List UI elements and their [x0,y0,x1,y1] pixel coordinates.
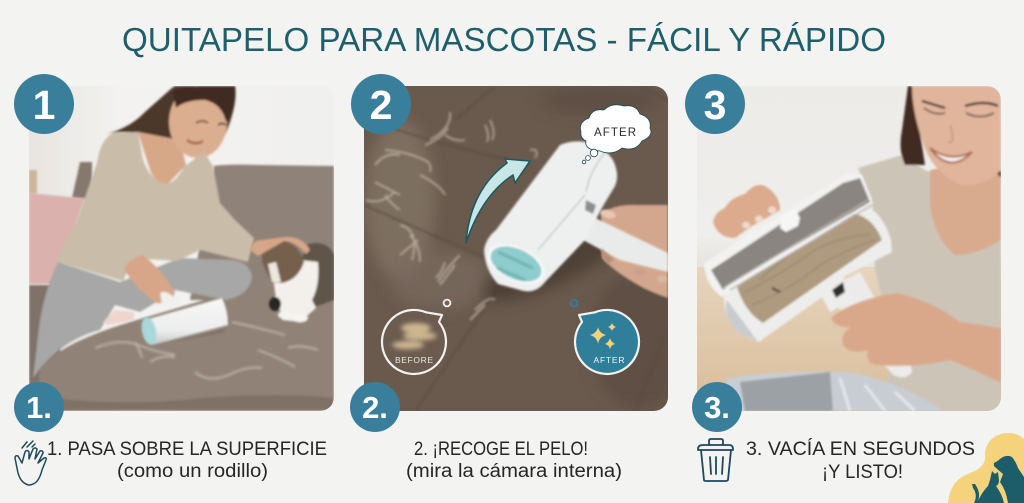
badge: step 3: 3 [704,82,726,128]
badge: step 2: 2 [370,82,392,128]
callout: after: AFTER [594,355,624,365]
wall background [29,86,80,342]
woman [858,86,1001,411]
caption: step 1 [47,439,327,482]
title: QUITAPELO PARA MASCOTAS - FÁCIL Y RÁPIDO [122,21,886,58]
floor [697,267,1001,411]
fabric tone variations [365,85,690,410]
roller tool [139,292,228,346]
hair back [108,86,237,140]
badge: 3.: 3. [704,390,730,425]
pants [33,258,252,378]
hand on roller [124,255,175,303]
pet hair wisps [366,112,537,320]
badge: 2.: 2. [362,390,388,425]
caption: step 3: 3. VACÍA EN SEGUNDOS [746,439,975,460]
callout: before [382,300,450,374]
thought bubble: after [580,105,651,164]
decorative corner: yellow blob with pets [948,433,1024,503]
icon: cat silhouette [972,471,1004,503]
face [169,86,227,158]
wall [697,86,906,267]
hair roll [737,213,882,323]
caption: step 1: 1. PASA SOBRE LA SUPERFICIE [47,439,327,460]
shirt [858,155,1001,411]
cat [250,237,334,322]
handle [825,272,912,378]
badge: 1. [14,382,64,432]
caption: step 2: 2. ¡RECOGE EL PELO! [414,439,588,460]
badge: step 3 [685,74,745,134]
caption: step 2 [406,439,622,482]
callout: after [571,300,639,374]
badge: 3. [692,382,742,432]
badge: 1.: 1. [26,390,52,425]
lower hand [831,293,1001,383]
shadow under tool [479,241,604,305]
neck and chest [138,132,186,184]
panel: step 1 photo, woman rolling sofa beside cat [29,86,334,411]
pet hair on sofa [95,322,318,378]
panel: step 2 photo, roller on sofa with hair [364,85,690,411]
badge: 2. [350,382,400,432]
thought bubble: after: AFTER [594,127,636,139]
trash bin with bag [725,372,943,411]
hand on cat [250,237,310,256]
caption: step 2: (mira la cámara interna) [406,461,622,482]
woman [33,86,254,378]
icon: trash can [698,439,733,481]
icon: waving hand [15,441,46,485]
roller tool with teal end [482,141,668,292]
pink pillow [29,193,85,284]
thumb nail and finger nails [599,208,667,283]
fabric seams [365,98,668,254]
sofa [29,162,334,411]
tool with collected hair [704,173,912,378]
hair [901,86,925,165]
panel: step 3 photo, woman emptying the tool [697,86,1001,411]
neck and chest [930,160,1001,255]
sweater [55,132,254,281]
tool body [723,205,892,342]
open lid [704,173,872,297]
face [912,86,1001,185]
sock [103,310,134,325]
caption: step 3 [746,439,975,483]
icon: dog silhouette [994,456,1024,503]
badge: step 1: 1 [33,82,55,128]
caption: step 1: (como un rodillo) [117,461,268,482]
upper hand [713,185,780,238]
arrow [466,159,530,243]
badge: step 1 [14,74,74,134]
hand holding tool [601,205,668,298]
callout: before: BEFORE [395,355,433,365]
badge: step 2 [351,74,411,134]
sofa fabric [364,86,668,411]
caption: step 3: ¡Y LISTO! [822,462,903,483]
